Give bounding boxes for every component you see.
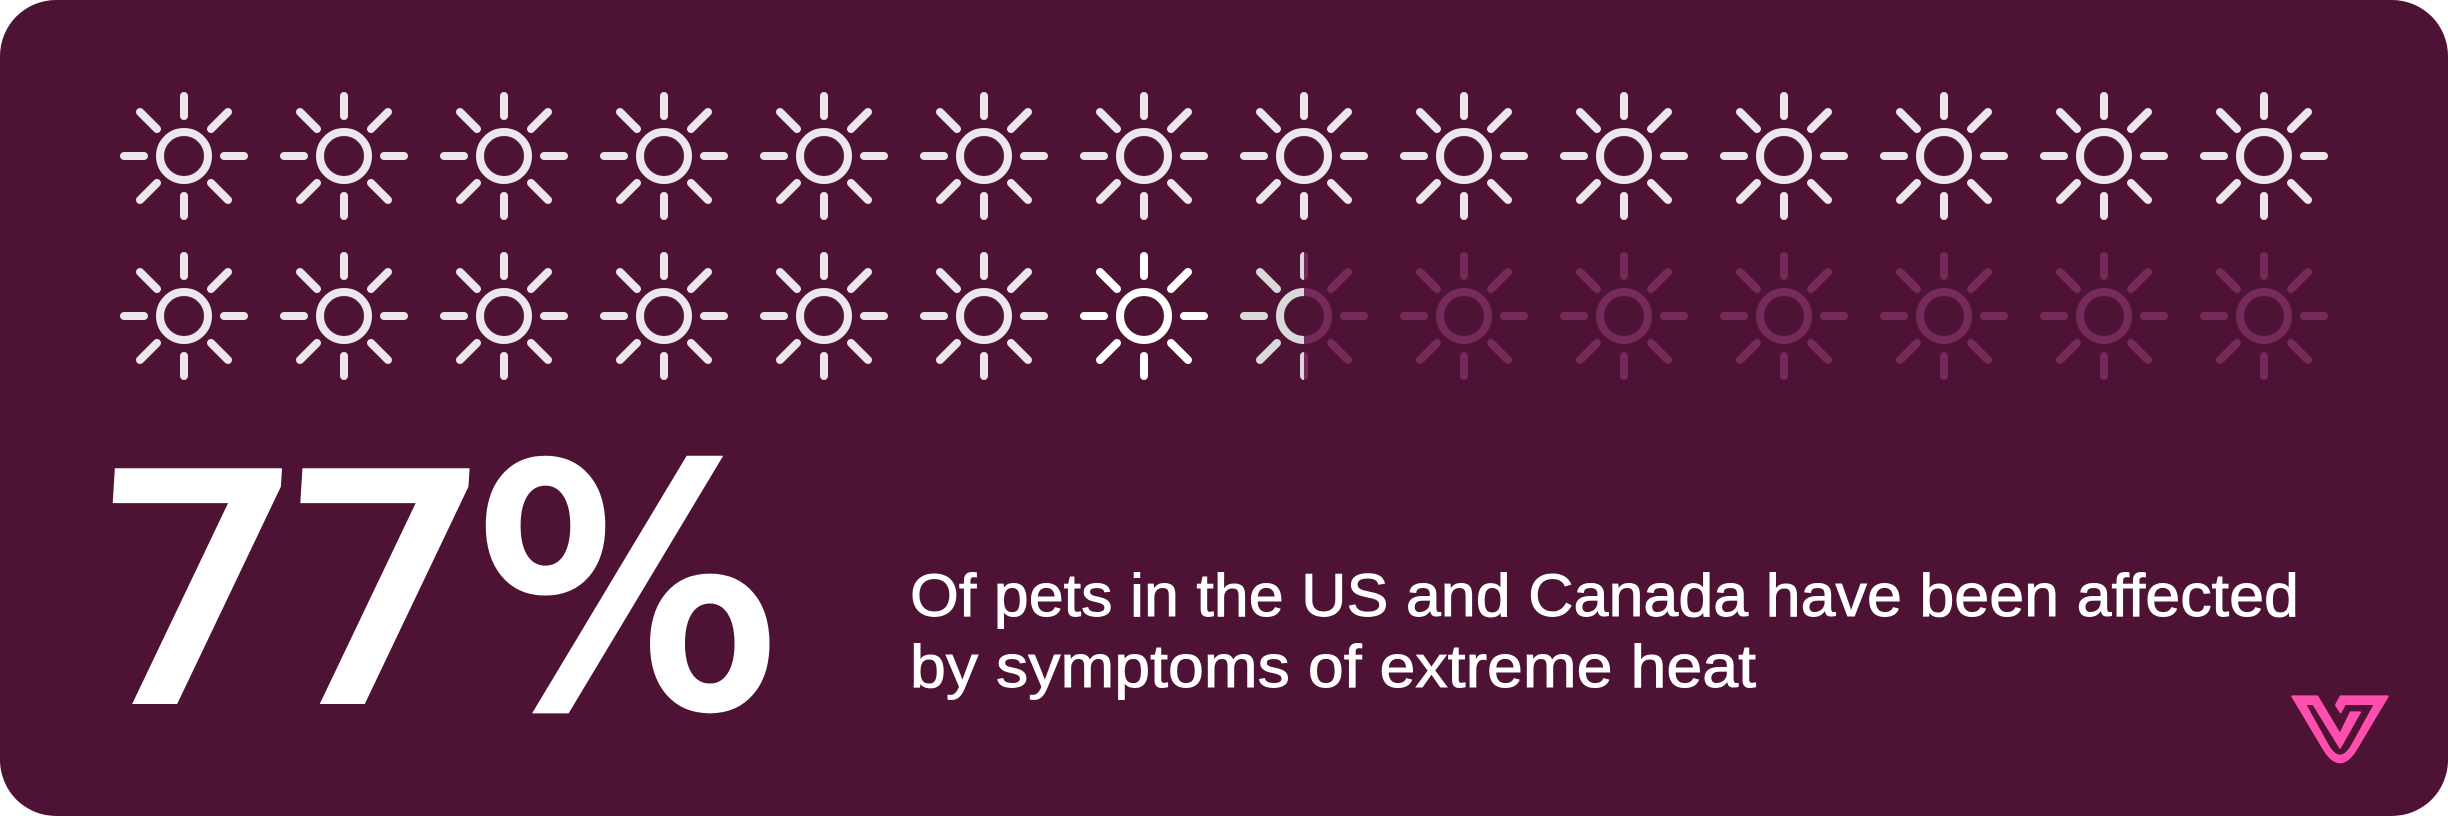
big statistic: 77% <box>73 400 783 782</box>
icon row: bottom row dimmed suns <box>1404 256 2324 376</box>
icon row: bottom row filled suns <box>124 256 1044 376</box>
caption text <box>910 562 2299 700</box>
icon row: top row of suns <box>124 96 2324 216</box>
big statistic: 77%: 7 <box>73 412 309 773</box>
icon: pink V logo <box>2292 696 2388 762</box>
caption text: by symptoms of extreme heat <box>910 633 1756 700</box>
caption text: Of pets in the US and Canada have been affected <box>910 562 2299 629</box>
icon: white sun <box>1084 256 1204 376</box>
icon: partially filled sun <box>1244 256 1364 376</box>
big statistic: 77%: 7 <box>261 412 497 773</box>
big statistic: 77%: % <box>472 400 783 782</box>
